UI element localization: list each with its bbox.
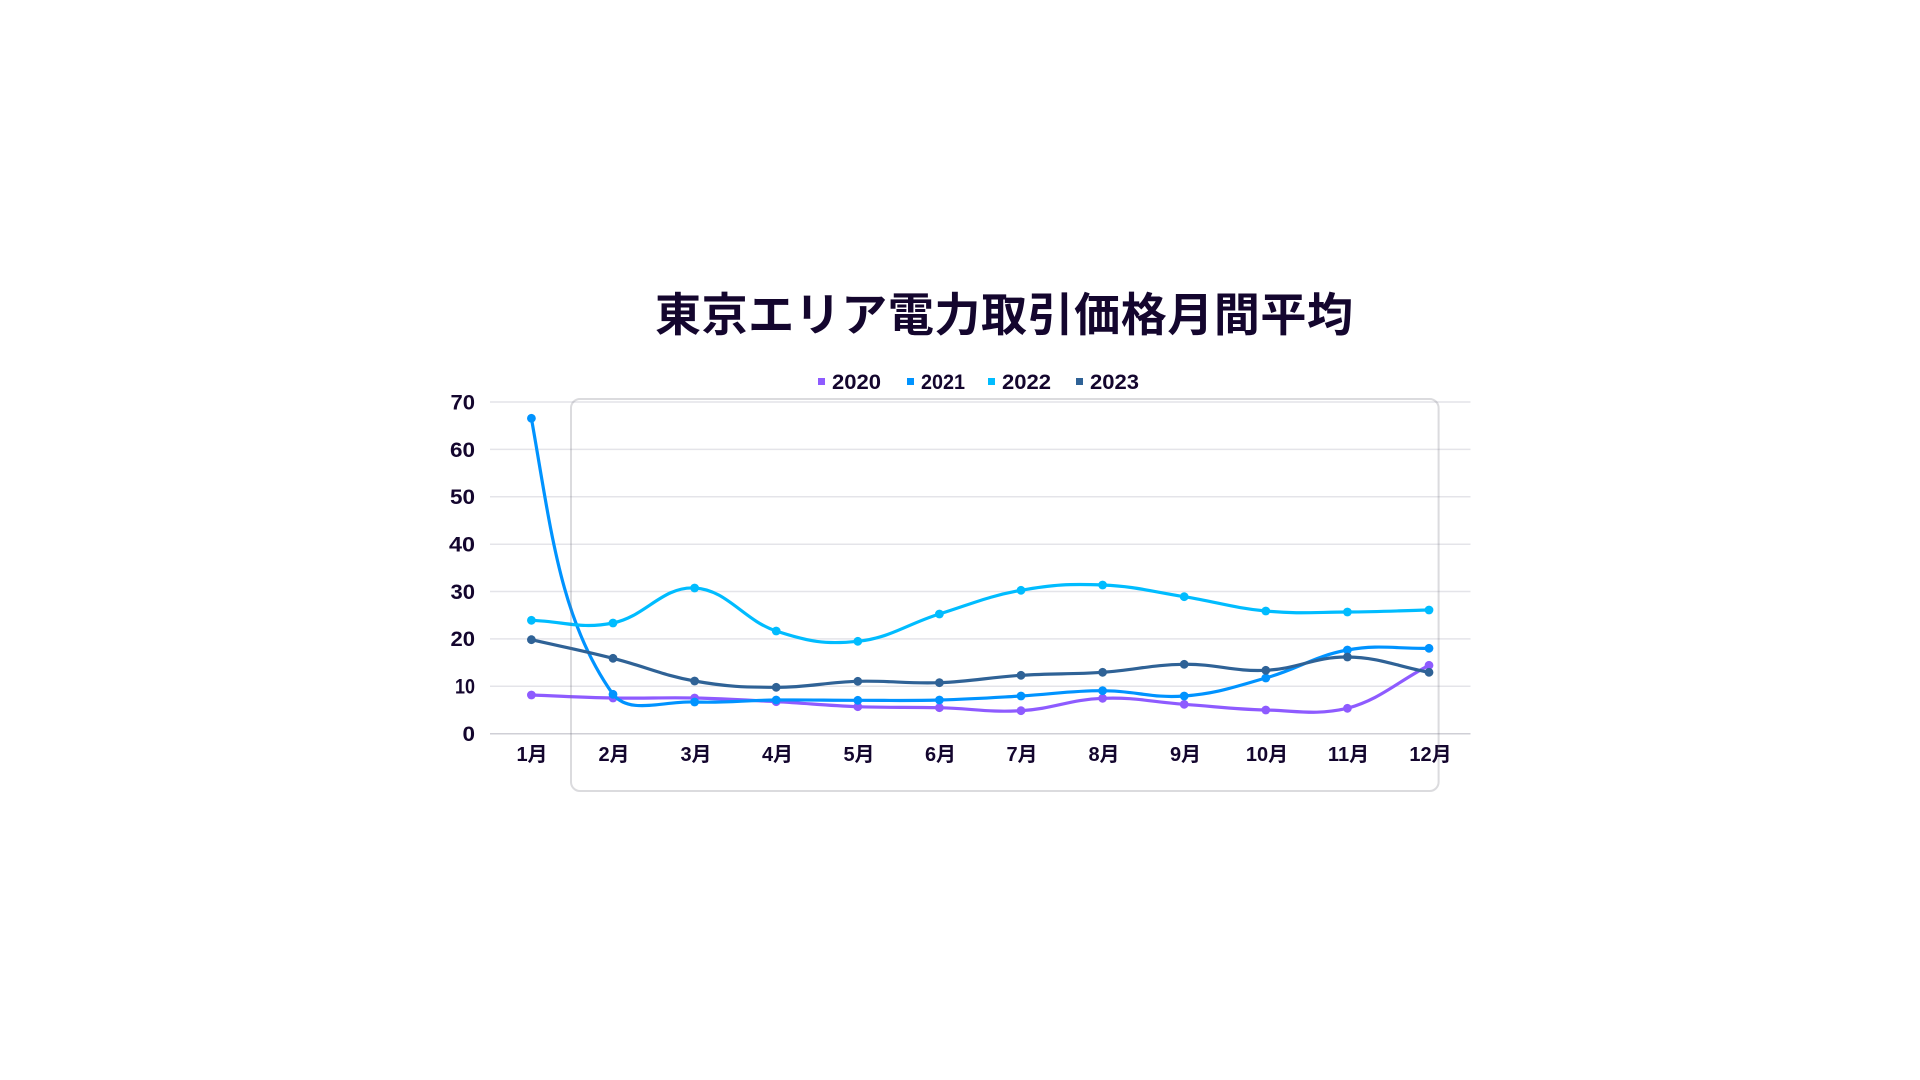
y axis labels: 40	[449, 534, 475, 556]
y axis labels: 30	[450, 581, 475, 604]
rounded frame overlay	[571, 399, 1439, 791]
x axis labels: 3月	[680, 744, 712, 766]
y axis labels: 0	[462, 723, 475, 746]
series: 2021	[527, 414, 1433, 706]
x axis labels: 2月	[598, 744, 630, 766]
title: 東京エリア電力取引価格月間平均	[655, 289, 1353, 341]
grid lines	[490, 402, 1470, 734]
series: 2022	[527, 581, 1433, 646]
series: 2023	[527, 635, 1433, 692]
y axis labels: 20	[450, 628, 475, 651]
x axis labels: 8月	[1088, 744, 1120, 766]
y axis labels: 60	[450, 439, 475, 462]
x axis labels	[516, 744, 1452, 766]
y axis labels: 10	[455, 676, 475, 698]
x axis labels: 11月	[1328, 744, 1369, 766]
legend item: 2023: 2023	[1090, 371, 1139, 394]
x axis labels: 6月	[925, 744, 956, 766]
x axis labels: 12月	[1409, 744, 1452, 766]
legend item: 2020: 2020	[832, 371, 881, 394]
y axis labels	[449, 392, 475, 746]
x axis labels: 10月	[1246, 744, 1288, 766]
x axis labels: 9月	[1170, 744, 1201, 766]
legend item: 2022: 2022	[1002, 371, 1051, 394]
x axis labels: 5月	[843, 744, 875, 766]
legend item: 2021: 2021	[921, 371, 965, 394]
x axis labels: 4月	[762, 744, 793, 766]
y axis labels: 50	[450, 486, 475, 509]
y axis labels: 70	[450, 392, 475, 414]
x axis labels: 1月	[516, 744, 548, 766]
x axis labels: 7月	[1006, 744, 1038, 766]
legend	[818, 371, 1139, 394]
series: 2020	[527, 661, 1433, 715]
